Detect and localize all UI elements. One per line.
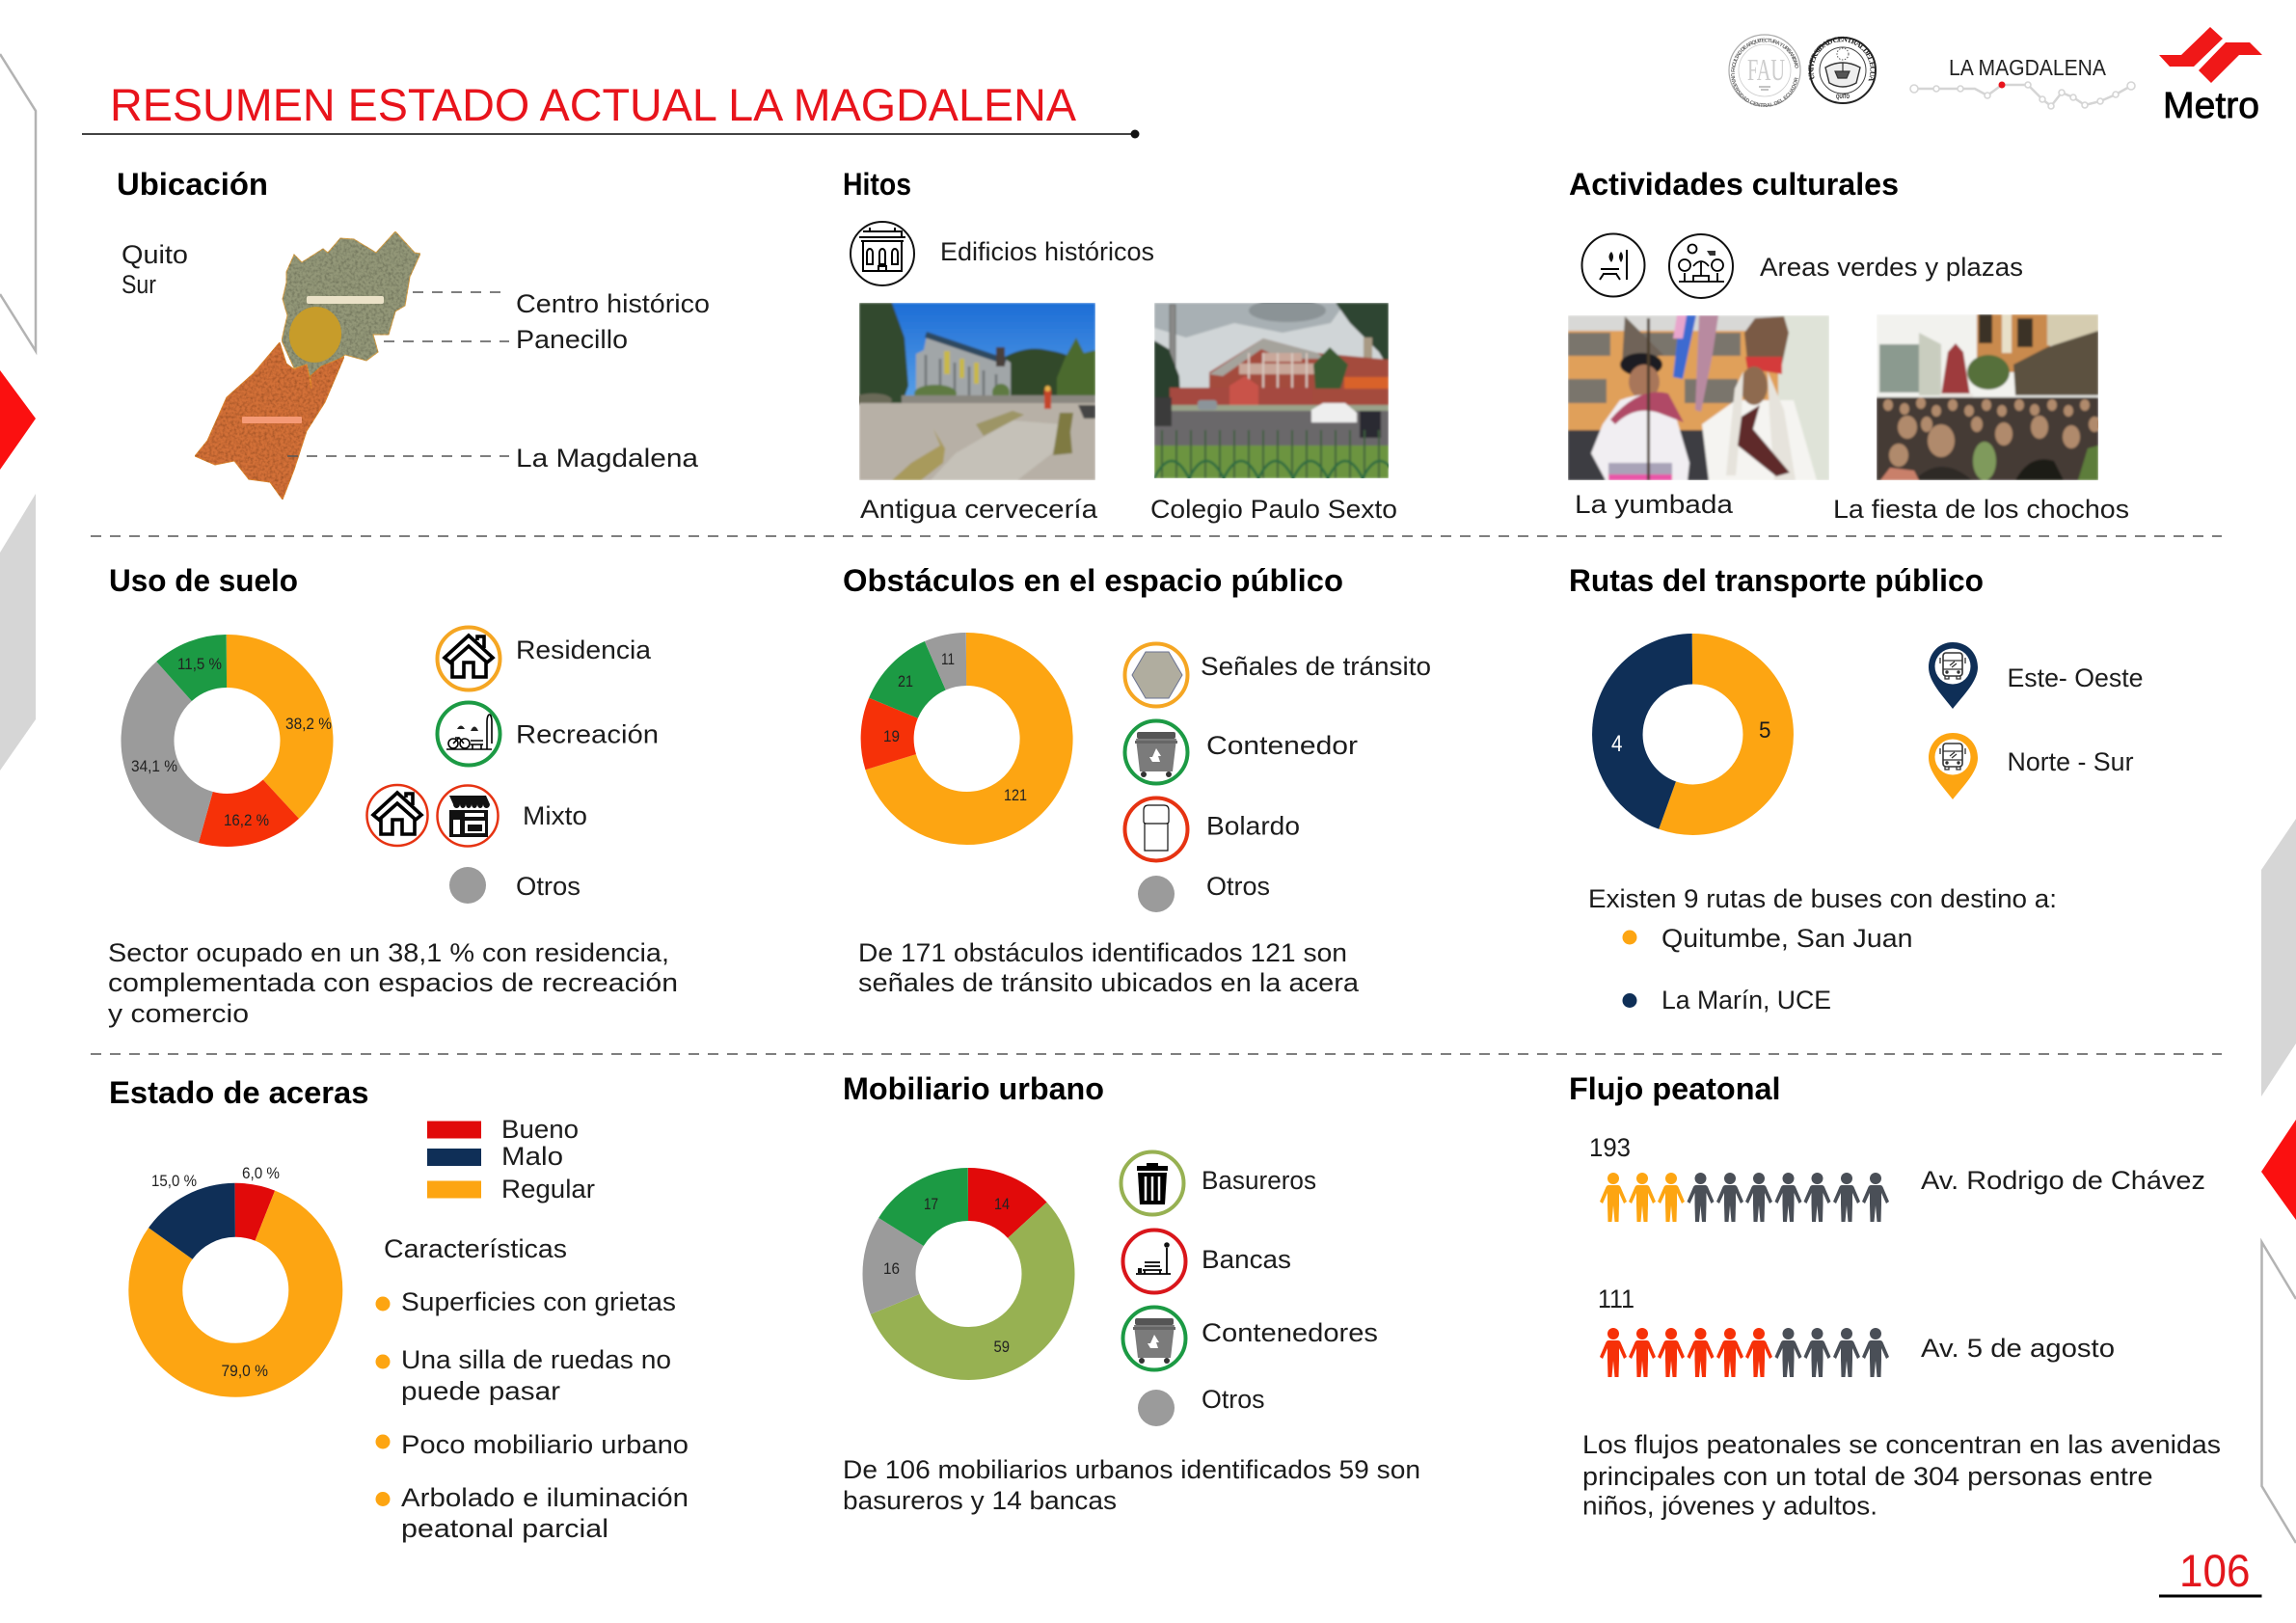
donut chart: aceras: 6,0 %: [242, 1164, 280, 1182]
heading: hitos: Hitos: [843, 167, 911, 202]
logos: FAU and Universidad Central: UNIVERSIDAD CENTRAL DEL ECUADOR: [1731, 73, 1798, 107]
text: rutas summary: Existen 9 rutas de buses con destino a:: [1588, 884, 2057, 913]
icon: mixto store: [438, 785, 498, 847]
label: otros: Otros: [1206, 872, 1270, 901]
icon: pin este-oeste: [1929, 642, 1978, 709]
photo: la yumbada: [1568, 315, 1829, 480]
donut chart: uso de suelo: 34,1 %: [131, 757, 177, 775]
list: características: Una silla de ruedas no: [401, 1345, 671, 1374]
list: características: Superficies con grietas: [401, 1287, 676, 1316]
label: panecillo: Panecillo: [516, 325, 628, 354]
panel: obstáculos: [843, 563, 1431, 997]
value: 193: 193: [1589, 1133, 1631, 1162]
text: uso de suelo summary: [108, 938, 678, 1028]
panel: flujo peatonal: [1569, 1071, 2221, 1520]
icon: bench and plants: [1581, 233, 1645, 297]
icon: plaza with fountain: [1669, 234, 1733, 298]
label: la yumbada: La yumbada: [1575, 490, 1734, 519]
photo: antigua cervecería: [853, 303, 1095, 480]
label: basureros: Basureros: [1202, 1166, 1316, 1195]
text: flujo summary: [1582, 1430, 2221, 1520]
label: este-oeste: Este- Oeste: [2008, 663, 2143, 692]
donut chart: mobiliario: 17: [924, 1195, 938, 1213]
list item: La Marín: La Marín, UCE: [1661, 986, 1831, 1014]
donut chart: mobiliario: [883, 1194, 1048, 1356]
icon: historic building: [851, 222, 914, 285]
donut chart: uso de suelo: 11,5 %: [177, 655, 222, 673]
route line logo La Magdalena: [1910, 55, 2135, 109]
label: edificios históricos: Edificios históricos: [940, 237, 1154, 266]
icon: otros dot: [1138, 876, 1175, 912]
label: Av. 5 de agosto: Av. 5 de agosto: [1921, 1334, 2115, 1363]
legend: aceras: Malo: [501, 1142, 563, 1171]
label: mixto: Mixto: [523, 801, 587, 830]
donut chart: rutas: 5: [1759, 717, 1770, 744]
label: Av. Rodrigo de Chávez: Av. Rodrigo de Chávez: [1921, 1166, 2205, 1195]
label: norte-sur: Norte - Sur: [2008, 747, 2133, 776]
list: características: peatonal parcial: [401, 1514, 608, 1543]
legend: aceras: Regular: [501, 1175, 595, 1204]
label: la magdalena: La Magdalena: [516, 444, 699, 473]
heading: rutas: Rutas del transporte público: [1569, 563, 1984, 598]
donut chart: obstáculos: 19: [883, 727, 900, 745]
panel: estado de aceras: [109, 1075, 689, 1543]
title: RESUMEN ESTADO ACTUAL LA MAGDALENA: [110, 79, 1077, 130]
photo: colegio Paulo Sexto: [1154, 299, 1397, 478]
text: obstáculos summary: señales de tránsito ubicados en la acera: [858, 968, 1360, 997]
heading: características: Características: [384, 1234, 567, 1263]
heading: estado de aceras: Estado de aceras: [109, 1075, 368, 1110]
label: la fiesta de los chochos: La fiesta de los chochos: [1833, 495, 2129, 524]
panel: rutas del transporte público: [1569, 563, 2143, 1014]
heading: flujo peatonal: Flujo peatonal: [1569, 1071, 1780, 1106]
left side decoration: [0, 54, 36, 771]
label: otros: Otros: [1202, 1385, 1265, 1414]
label: contenedor: Contenedor: [1206, 731, 1358, 760]
icon: pin norte-sur: [1929, 733, 1978, 799]
donut chart: obstáculos: [883, 650, 1046, 818]
icon: residencia: [438, 627, 500, 690]
panel: hitos: [843, 167, 1397, 524]
label: bolardo: Bolardo: [1206, 812, 1300, 841]
heading: mobiliario urbano: Mobiliario urbano: [843, 1071, 1104, 1106]
text: flujo summary: Los flujos peatonales se concentran en las avenidas: [1582, 1430, 2221, 1459]
donut chart: aceras: 15,0 %: [151, 1172, 197, 1190]
logos: FAU and Universidad Central: QUITO: [1836, 95, 1850, 100]
donut chart: obstáculos: 21: [898, 672, 913, 690]
leader lines: [287, 292, 509, 456]
pictogram: Av. 5 de agosto: [1600, 1328, 1889, 1377]
icon: mixto house: [366, 785, 428, 846]
donut chart: uso de suelo: 16,2 %: [224, 811, 269, 829]
icon: recreación: [438, 702, 500, 766]
label: Quito Sur: Sur: [122, 270, 156, 299]
text: uso de suelo summary: Sector ocupado en un 38,1 % con residencia,: [108, 938, 669, 967]
text: uso de suelo summary: y comercio: [108, 999, 249, 1028]
donut chart: mobiliario: 16: [883, 1259, 900, 1278]
logos: FAU and Universidad Central: [1728, 34, 1877, 107]
icon: señales de tránsito: [1124, 644, 1188, 706]
value: 111: 111: [1598, 1285, 1634, 1313]
text: flujo summary: principales con un total de 304 personas entre: [1582, 1462, 2152, 1491]
text: flujo summary: niños, jóvenes y adultos.: [1582, 1491, 1877, 1520]
label: centro histórico: Centro histórico: [516, 289, 710, 318]
legend: aceras: Bueno: [501, 1115, 579, 1144]
label: Quito Sur: Quito: [122, 240, 188, 269]
donut chart: mobiliario: 14: [994, 1195, 1010, 1213]
route line logo La Magdalena: LA MAGDALENA: [1949, 55, 2107, 80]
Metro logo: Metro: [2163, 86, 2259, 126]
photo: la fiesta de los chochos: [1877, 314, 2100, 480]
donut chart: mobiliario: 59: [993, 1338, 1010, 1356]
panel: uso de suelo: [108, 563, 678, 1028]
list item: Quitumbe: Quitumbe, San Juan: [1661, 924, 1913, 953]
heading: obstáculos: Obstáculos en el espacio público: [843, 563, 1343, 598]
label: contenedores: Contenedores: [1202, 1318, 1378, 1347]
icon: contenedores: [1122, 1308, 1186, 1369]
text: mobiliario summary: [843, 1455, 1420, 1515]
Metro logo: [2159, 27, 2262, 126]
donut chart: aceras: [151, 1164, 315, 1380]
icon: basureros: [1121, 1151, 1184, 1215]
label: recreación: Recreación: [516, 719, 659, 748]
icon: otros dot: [1138, 1390, 1175, 1426]
pictogram: Av. Rodrigo de Chávez: [1600, 1173, 1889, 1222]
label: Quito Sur: [122, 240, 188, 299]
icon: bancas: [1122, 1231, 1186, 1292]
donut chart: uso de suelo: [131, 655, 332, 829]
label: bancas: Bancas: [1202, 1245, 1291, 1274]
label: áreas verdes y plazas: Areas verdes y plazas: [1760, 253, 2023, 282]
donut chart: uso de suelo: 38,2 %: [285, 715, 332, 733]
label: antigua cervecería: Antigua cervecería: [860, 495, 1098, 524]
label: residencia: Residencia: [516, 636, 652, 664]
list: características: puede pasar: [401, 1377, 560, 1406]
donut chart: aceras: 79,0 %: [222, 1362, 268, 1380]
panel: ubicación: [117, 167, 710, 500]
page number: 106: [2179, 1545, 2251, 1596]
heading: uso de suelo: Uso de suelo: [109, 563, 298, 598]
heading: ubicación: Ubicación: [117, 167, 268, 202]
text: obstáculos summary: De 171 obstáculos identificados 121 son: [858, 938, 1347, 967]
label: señales de tránsito: Señales de tránsito: [1201, 652, 1431, 681]
donut chart: obstáculos: 11: [941, 650, 955, 668]
text: uso de suelo summary: complementada con espacios de recreación: [108, 968, 678, 997]
logos: FAU and Universidad Central: FAU: [1747, 52, 1785, 87]
panel: mobiliario urbano: [843, 1071, 1420, 1515]
text: mobiliario summary: basureros y 14 bancas: [843, 1486, 1117, 1515]
icon: bolardo: [1124, 798, 1188, 860]
list: características: [376, 1287, 689, 1543]
right side decoration: [2261, 819, 2296, 1543]
logos: FAU and Universidad Central: FACULTAD DE ARQUITECTURA Y URBANISMO: [1731, 39, 1799, 72]
icon: otros dot: [449, 867, 486, 904]
panel: actividades culturales: [1568, 167, 2129, 524]
map of Quito south: [195, 231, 420, 500]
donut chart: rutas: 4: [1611, 731, 1622, 757]
icon: contenedor: [1124, 721, 1188, 783]
donut chart: obstáculos: 121: [1004, 786, 1027, 804]
list: características: Poco mobiliario urbano: [401, 1430, 689, 1459]
legend: aceras: [427, 1115, 595, 1204]
label: otros: Otros: [516, 872, 581, 901]
heading: actividades culturales: Actividades culturales: [1569, 167, 1899, 202]
text: mobiliario summary: De 106 mobiliarios urbanos identificados 59 son: [843, 1455, 1420, 1484]
label: colegio Paulo Sexto: Colegio Paulo Sexto: [1150, 495, 1397, 524]
text: obstáculos summary: [858, 938, 1360, 997]
list: características: Arbolado e iluminación: [401, 1483, 689, 1512]
donut chart: rutas: [1611, 659, 1770, 810]
